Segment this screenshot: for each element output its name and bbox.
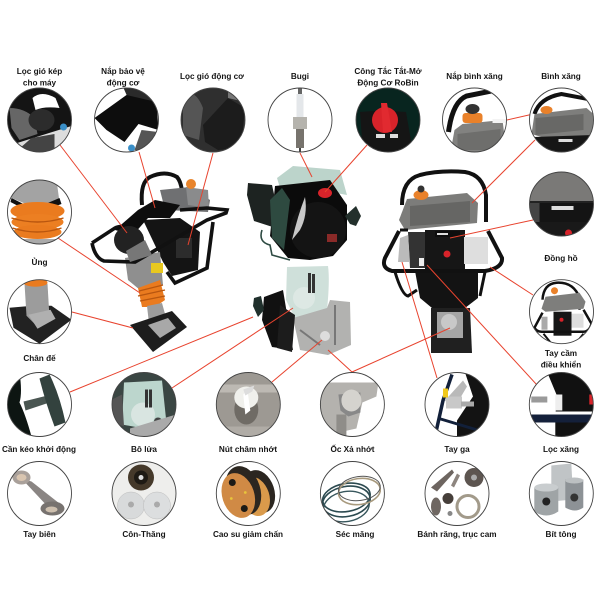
labels: Bô lửa xyxy=(131,445,157,454)
labels: động cơ xyxy=(107,78,140,88)
part: Ốc xả nhớt xyxy=(320,372,384,436)
part: Bugi xyxy=(268,88,332,152)
machine: engine top view xyxy=(247,166,361,260)
labels: Tay ga xyxy=(444,445,470,454)
machine: engine lower view xyxy=(253,266,351,355)
part: Ủng xyxy=(8,180,72,245)
part: Tay ga xyxy=(425,372,489,436)
labels: Đồng hồ xyxy=(544,254,578,263)
labels: Bugi xyxy=(291,72,309,81)
part: Công tắc tắt mở xyxy=(356,88,420,152)
part: Tay cầm điều khiển xyxy=(530,280,594,344)
labels: Nắp bảo vệ xyxy=(101,65,145,76)
labels: Lọc gió động cơ xyxy=(180,72,244,81)
labels: Nút châm nhớt xyxy=(219,445,277,454)
labels: Cần kéo khởi động xyxy=(2,445,76,454)
part: Nắp bảo vệ động cơ xyxy=(94,88,158,152)
labels: Ủng xyxy=(32,256,47,267)
labels: Tay biên xyxy=(23,530,56,539)
machine: left rammer xyxy=(92,174,227,352)
labels: Lọc gió kép xyxy=(17,67,62,76)
labels: cho máy xyxy=(23,78,57,88)
machine: right rammer xyxy=(384,171,502,353)
part: Tay biên xyxy=(8,462,72,526)
part: Séc măng xyxy=(320,462,384,526)
labels: Cao su giảm chấn xyxy=(213,530,283,539)
part: Lọc gió động cơ xyxy=(181,88,245,152)
part: Lọc xăng xyxy=(529,372,593,436)
labels: Chân đế xyxy=(23,354,56,363)
labels: Côn-Thăng xyxy=(122,530,166,539)
callout lines xyxy=(58,112,542,392)
labels: điều khiển xyxy=(541,360,581,370)
part: Cần kéo khởi động xyxy=(8,372,72,436)
labels: Séc măng xyxy=(336,530,374,539)
part: Bánh răng, trục cam xyxy=(425,462,489,526)
labels: Công Tắc Tắt-Mở xyxy=(354,65,422,76)
labels: Nắp bình xăng xyxy=(446,70,503,81)
part: Đồng hồ xyxy=(530,172,594,236)
labels: Bình xăng xyxy=(541,72,581,81)
labels xyxy=(2,65,581,539)
labels: Động Cơ RoBin xyxy=(357,78,419,88)
labels: Tay cầm xyxy=(545,349,577,358)
part: Chân đế xyxy=(8,279,72,344)
part: Bô lửa xyxy=(112,372,176,436)
labels: Bít tông xyxy=(546,530,576,539)
part: Cao su giảm chấn xyxy=(216,461,280,526)
part: Bình xăng xyxy=(530,88,594,152)
labels: Ốc Xả nhớt xyxy=(330,443,375,454)
part: Nắp bình xăng xyxy=(442,88,506,152)
part: Lọc gió kép xyxy=(8,88,72,152)
part: Bít tông xyxy=(529,462,593,526)
part: Côn-Thăng xyxy=(112,462,176,526)
labels: Bánh răng, trục cam xyxy=(417,530,497,539)
part: Nút châm nhớt xyxy=(216,372,280,436)
labels: Lọc xăng xyxy=(543,445,579,454)
